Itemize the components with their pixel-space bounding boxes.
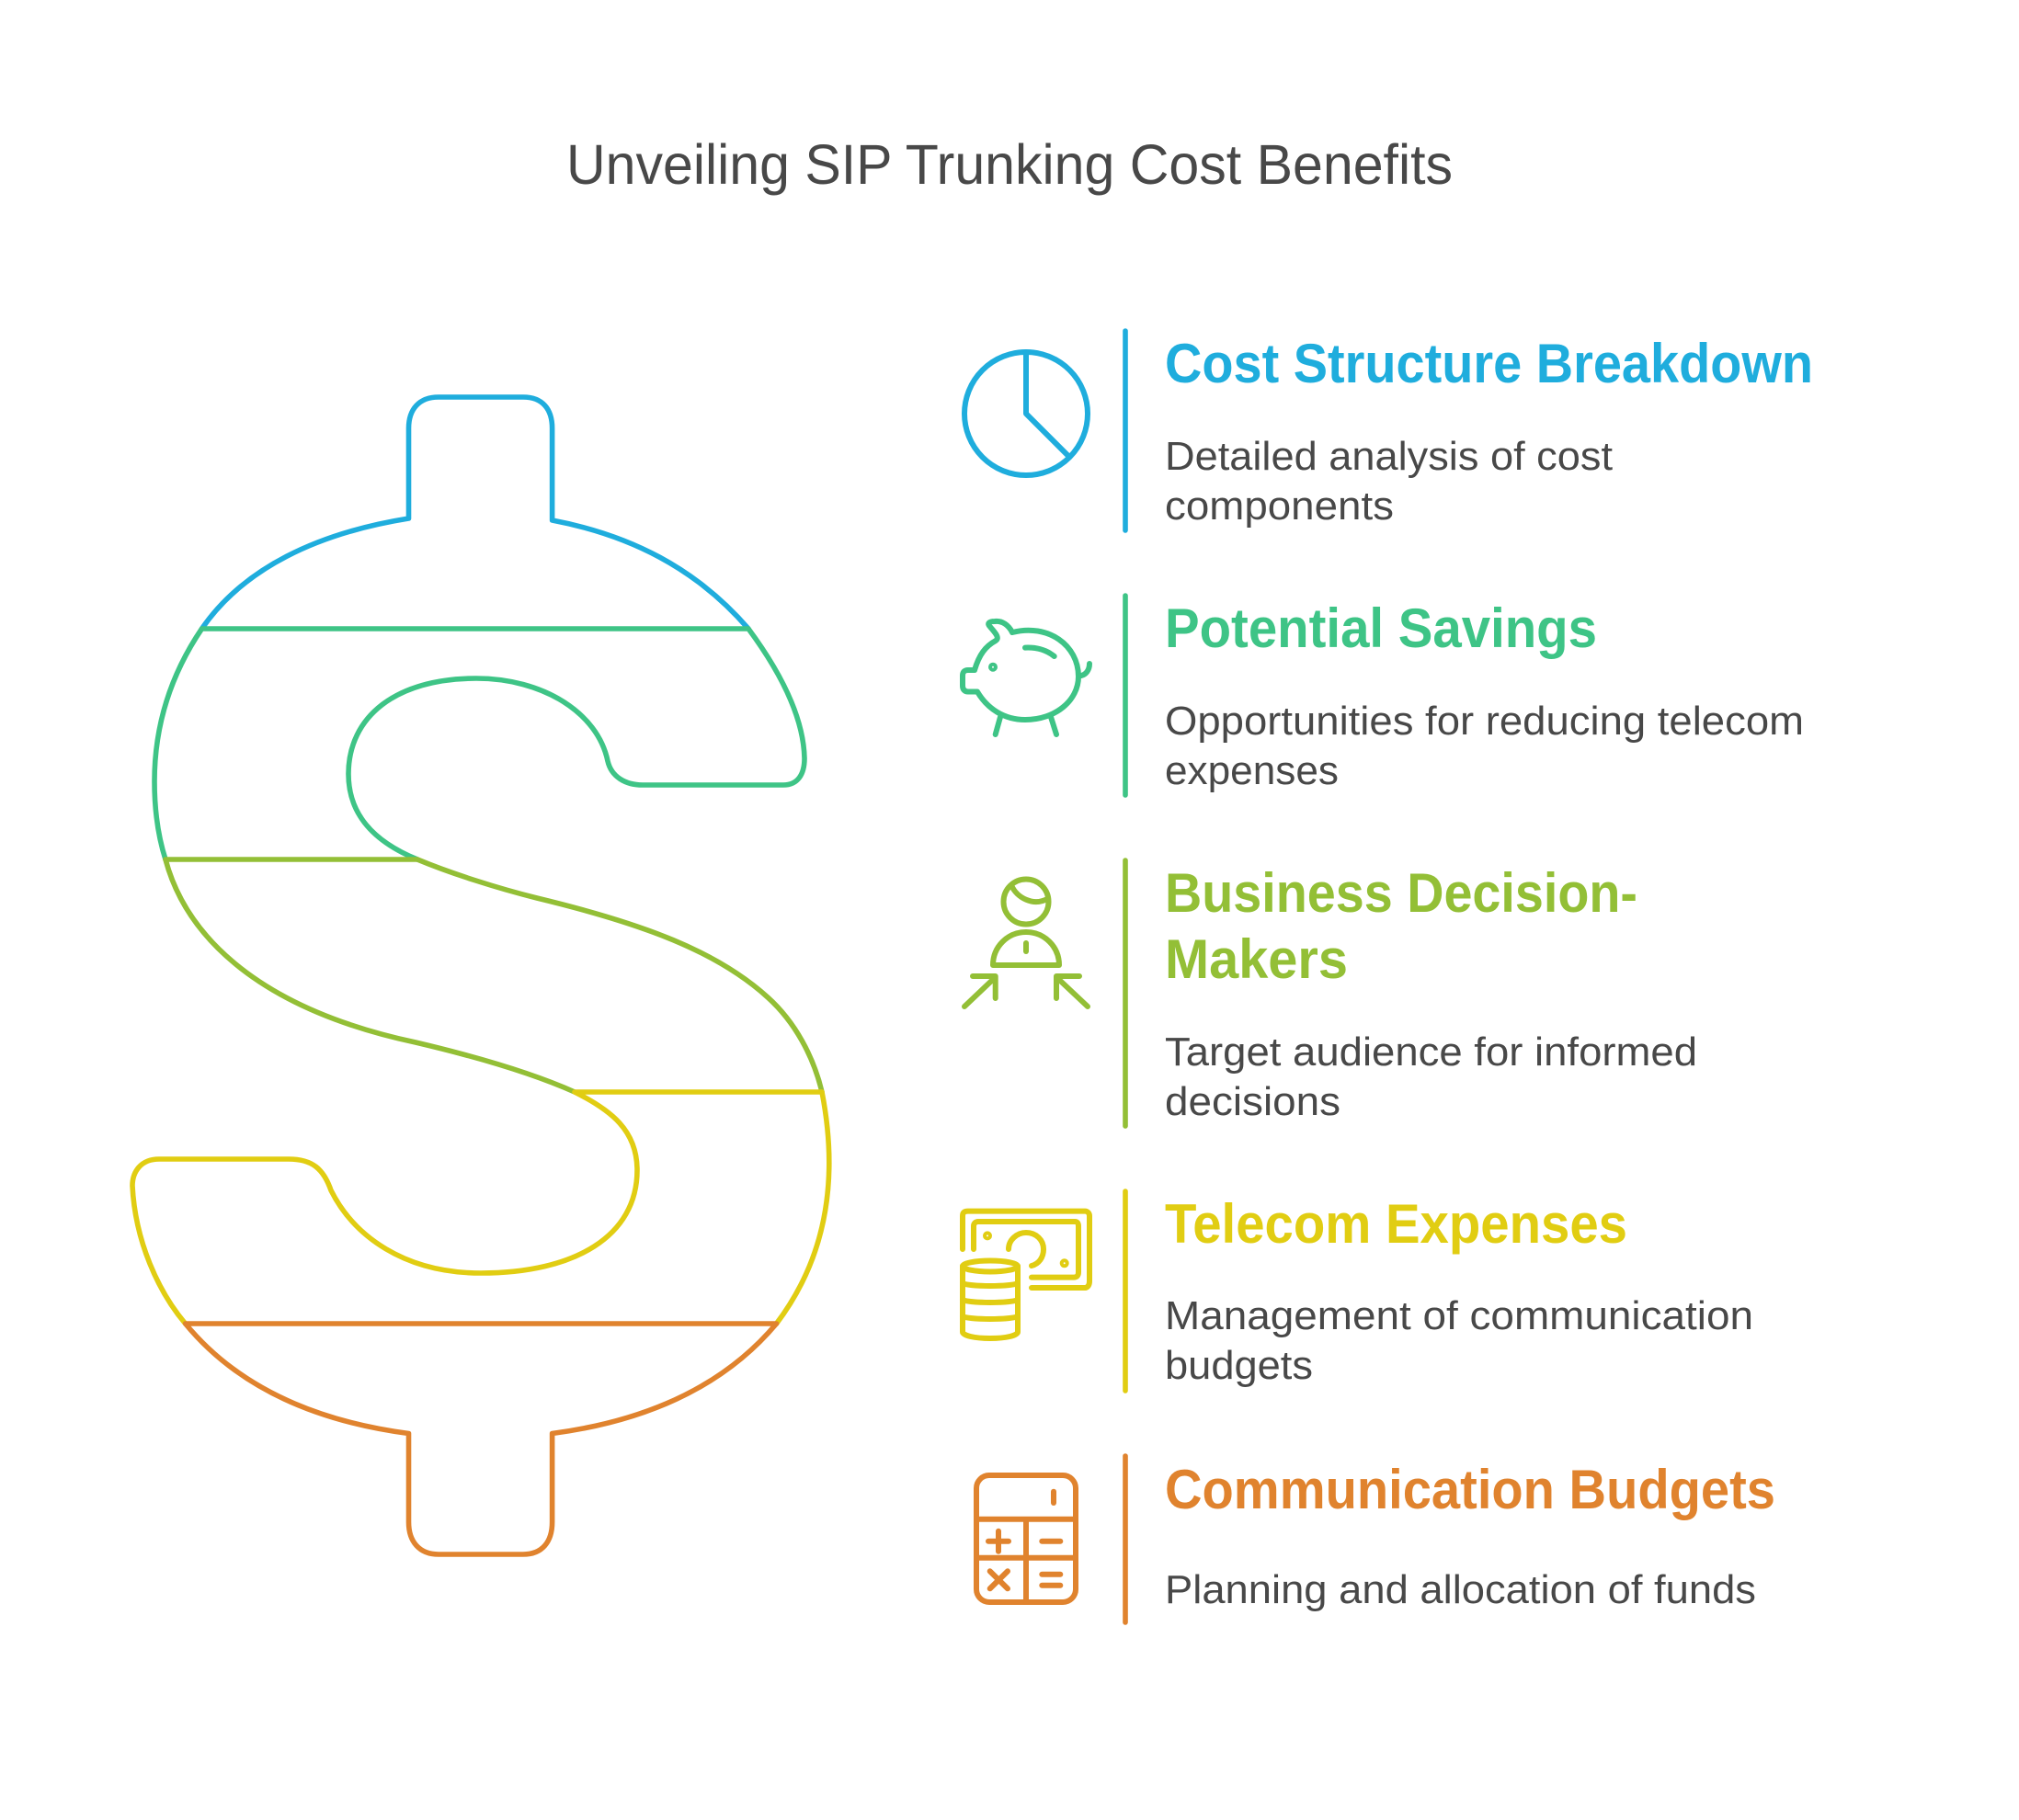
panel: cost structure breakdown [964, 331, 1813, 530]
panel: business decision-makers [964, 860, 1697, 1126]
description: business decision-makers: decisions [1165, 1079, 1340, 1124]
description: telecom expenses: budgets [1165, 1343, 1313, 1388]
description: telecom expenses: Management of communication [1165, 1293, 1753, 1338]
heading: cost structure breakdown: Cost Structure Breakdown [1165, 333, 1813, 394]
description: business decision-makers: Target audience for informed [1165, 1029, 1697, 1075]
description: potential savings: expenses [1165, 748, 1339, 793]
dollar segment: orange bottom [186, 1324, 777, 1554]
dollar sign illustration [132, 397, 829, 1554]
divider bar: orange [1123, 1456, 1128, 1622]
heading: telecom expenses: Telecom Expenses [1165, 1193, 1627, 1255]
description: cost structure: Detailed analysis of cost [1165, 434, 1613, 479]
title: Unveiling SIP Trunking Cost Benefits [566, 133, 1453, 196]
heading: business decision-makers: Business Decision- [1165, 862, 1637, 924]
heading: potential savings: Potential Savings [1165, 597, 1597, 659]
description: potential savings: Opportunities for reducing telecom [1165, 699, 1804, 744]
icon: banknotes and coins [963, 1211, 1089, 1338]
dollar segment: yellow lower [132, 1092, 829, 1324]
panel: potential savings [963, 596, 1804, 795]
icon: pie chart [964, 352, 1088, 475]
description: cost structure: components [1165, 483, 1394, 529]
dollar segment: green upper [154, 629, 804, 859]
heading: business decision-makers [1165, 862, 1637, 990]
panel: telecom expenses [963, 1191, 1753, 1391]
description: communication budgets: Planning and allocation of funds [1165, 1567, 1756, 1612]
description: potential savings [1165, 699, 1804, 793]
heading: business decision-makers: Makers [1165, 928, 1348, 990]
panel: communication budgets [976, 1456, 1775, 1622]
divider bar: olive [1123, 860, 1128, 1126]
divider bar: green [1123, 596, 1128, 795]
icon: calculator [976, 1475, 1076, 1602]
description: cost structure [1165, 434, 1613, 529]
description: telecom expenses [1165, 1293, 1753, 1388]
dollar segment: blue top [202, 397, 748, 629]
dollar segment: olive middle [165, 859, 822, 1092]
heading: communication budgets: Communication Budgets [1165, 1459, 1775, 1520]
icon: person with arrows [964, 879, 1088, 1007]
description: business decision-makers [1165, 1029, 1697, 1124]
icon: piggy bank [963, 621, 1089, 734]
divider bar: blue [1123, 331, 1128, 530]
divider bar: yellow [1123, 1191, 1128, 1391]
